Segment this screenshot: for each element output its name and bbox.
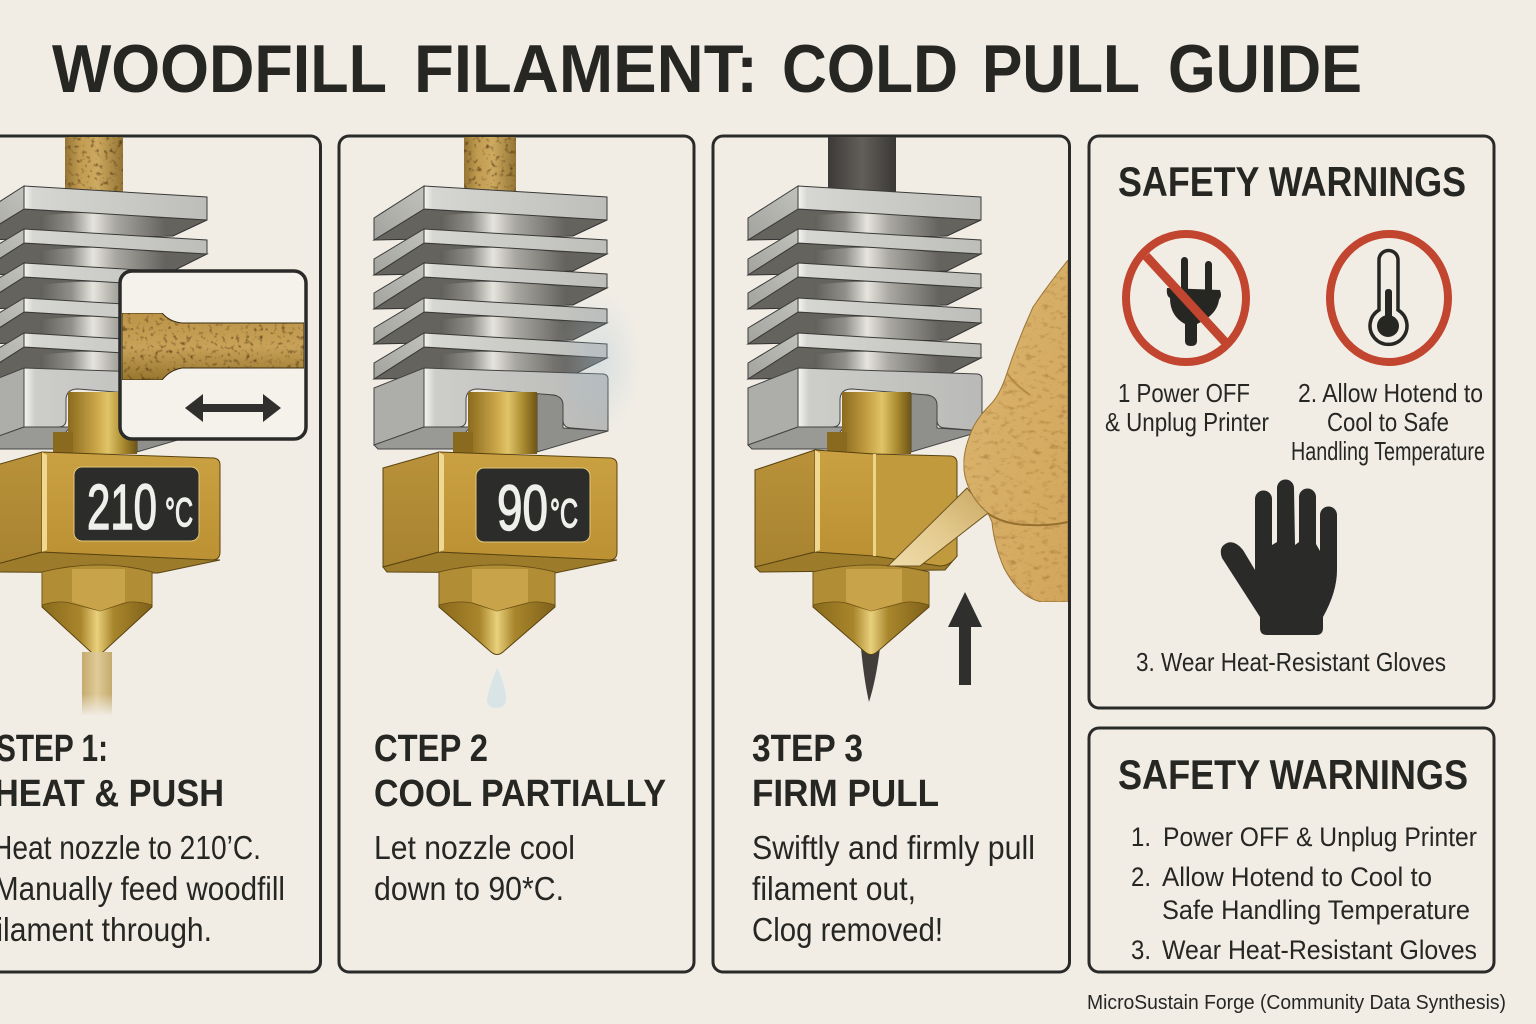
cold mist — [554, 290, 642, 434]
step 2 heading — [374, 728, 666, 815]
temperature display 90 C: 90 — [497, 472, 548, 544]
step 3 description: Clog removed! — [752, 911, 943, 948]
step 1 description — [0, 829, 285, 948]
panel: step 1 heat and push — [0, 136, 320, 972]
step 2 description: Let nozzle cool — [374, 829, 575, 866]
warning 1 text: 1 Power OFF — [1118, 378, 1250, 408]
temperature display 90 C — [476, 468, 590, 544]
filament: dark top — [828, 137, 896, 192]
hand gripping filament — [964, 260, 1068, 602]
arrow: pull up — [948, 592, 982, 685]
list item 2: Safe Handling Temperature — [1162, 895, 1470, 925]
step 1 heading: STEP 1: — [0, 728, 108, 770]
step 2 heading: CTEP 2 — [374, 728, 488, 770]
filament: woodfill top — [464, 137, 516, 192]
warning 1 text — [1105, 378, 1269, 437]
temperature display 210 C: 210 — [87, 471, 157, 543]
heat break — [827, 392, 911, 454]
step 3 heading — [752, 728, 939, 815]
warning 3 text: 3. Wear Heat-Resistant Gloves — [1136, 647, 1446, 677]
warning 2 text: 2. Allow Hotend to — [1298, 378, 1483, 408]
source credit: MicroSustain Forge (Community Data Synthesis) — [1087, 992, 1506, 1014]
heater block — [0, 452, 220, 573]
step 1 description: Heat nozzle to 210’C. — [0, 829, 261, 866]
icon: no plug — [1126, 234, 1246, 362]
heat break — [453, 392, 537, 454]
step 1 heading — [0, 728, 224, 815]
list item 3: Wear Heat-Resistant Gloves — [1162, 935, 1477, 965]
warning 2 text: Cool to Safe — [1327, 407, 1449, 437]
heater block — [383, 452, 617, 573]
title: GUIDE — [1168, 31, 1362, 107]
step 2 description: down to 90*C. — [374, 870, 564, 907]
filament: woodfill top — [65, 137, 123, 192]
panel: safety warnings icons — [1089, 136, 1494, 708]
inset: filament close-up — [120, 271, 306, 439]
title: PULL — [982, 31, 1140, 107]
heat sink — [0, 186, 208, 452]
nozzle — [813, 565, 929, 702]
heat break — [53, 392, 137, 454]
title — [52, 31, 1362, 107]
heater block — [755, 450, 957, 572]
list item 2: Allow Hotend to Cool to — [1162, 862, 1432, 892]
step 2 heading: COOL PARTIALLY — [374, 773, 666, 815]
warning 1 text: & Unplug Printer — [1105, 407, 1269, 437]
title: COLD — [782, 31, 958, 107]
filament: extruded below nozzle — [82, 652, 112, 716]
icon: thermometer — [1330, 234, 1448, 362]
heat sink — [748, 186, 982, 452]
safety heading: SAFETY WARNINGS — [1118, 158, 1466, 205]
panel: safety warnings list — [1089, 728, 1494, 972]
panel: step 3 firm pull — [713, 136, 1070, 972]
step 1 description: Manually feed woodfill — [0, 870, 285, 907]
nozzle — [42, 565, 152, 654]
icon: water drop — [487, 668, 506, 708]
step 2 description — [374, 829, 575, 907]
heat sink — [374, 186, 608, 452]
panel: step 2 cool partially — [339, 136, 694, 972]
arrow: double headed — [185, 394, 281, 422]
safety heading: SAFETY WARNINGS — [1118, 751, 1468, 798]
list item 1: 1. — [1131, 822, 1151, 852]
step 3 description — [752, 829, 1035, 948]
temperature display 210 C: °C — [165, 491, 193, 535]
step 1 heading: HEAT & PUSH — [0, 773, 224, 815]
step 3 description: filament out, — [752, 870, 916, 907]
icon: heat resistant glove — [1221, 480, 1337, 635]
list item 1: Power OFF & Unplug Printer — [1163, 822, 1477, 852]
nozzle — [439, 565, 555, 654]
title: FILAMENT: — [414, 31, 758, 107]
clog: dark filament tip — [861, 648, 880, 702]
list item 2: 2. — [1131, 862, 1151, 892]
list item 3: 3. — [1131, 935, 1151, 965]
temperature display 90 C: °C — [550, 492, 578, 536]
filament: pulled strand — [888, 488, 988, 566]
warning 2 text — [1291, 378, 1485, 466]
step 3 heading: FIRM PULL — [752, 773, 939, 815]
title: WOODFILL — [52, 31, 387, 107]
step 3 heading: 3TEP 3 — [752, 728, 863, 770]
step 3 description: Swiftly and firmly pull — [752, 829, 1035, 866]
list item 2 — [1131, 862, 1470, 925]
